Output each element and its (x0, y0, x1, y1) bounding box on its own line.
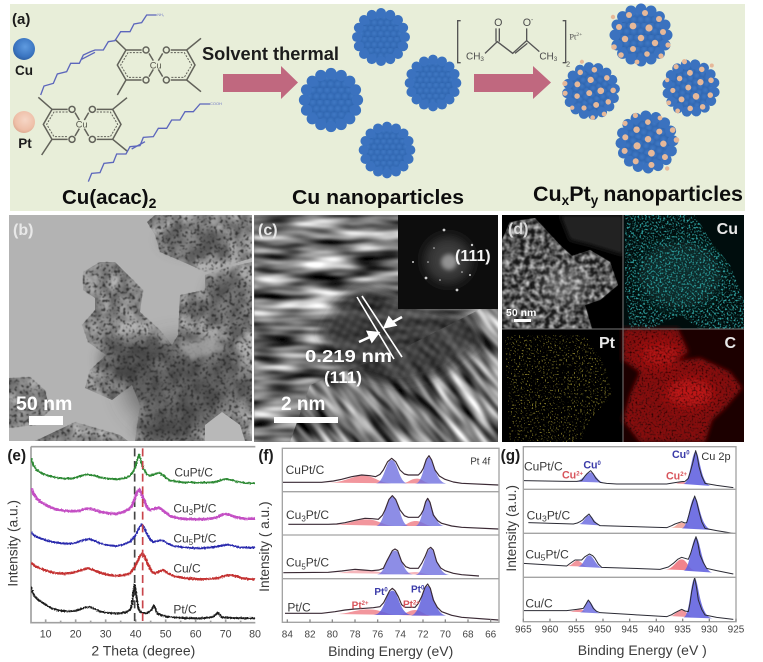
Pt peak annotations: 2+ (413, 600, 420, 606)
panel label g: (g) (501, 448, 520, 465)
lower Cu(acac)2 molecule (38, 97, 127, 155)
panel a: synthesis schematic (10, 4, 745, 211)
Pt 4f envelopes (282, 456, 498, 620)
XRD x tick labels: 60 (190, 628, 202, 640)
Cu nanoparticle (405, 55, 461, 111)
Cu 2p peak fills (567, 452, 713, 618)
Cu 2p series labels: 3 (542, 513, 547, 523)
CuPt nanoparticle (550, 50, 632, 132)
scale bar (514, 319, 531, 322)
XRD series labels: Pt/C (193, 531, 217, 545)
Pt peak annotations: Pt (374, 587, 384, 598)
panel label e: (e) (7, 448, 26, 465)
molecules: Cu(acac)2 with ligands (38, 13, 222, 182)
panel g: Cu 2p XPS (501, 447, 745, 658)
panel label a: (a) (12, 11, 30, 28)
XRD series labels (173, 466, 217, 616)
Cu 2p x ticks (523, 619, 736, 622)
Pt 4f x tick labels: 72 (417, 629, 429, 640)
Pt legend label: Pt (18, 136, 32, 151)
upper Cu(acac)2 molecule (115, 38, 201, 95)
Pt(acac)2 formula: 2 (566, 60, 570, 69)
panel label c: (c) (258, 222, 278, 239)
Pt 4f x tick labels: 82 (304, 629, 316, 640)
Cu 2p x tick labels: 925 (728, 624, 745, 635)
Cu 2p x tick labels: 950 (595, 624, 612, 635)
Cu legend label: Cu (15, 63, 33, 78)
Cu 2p frame and dividers (523, 447, 736, 622)
Pt 4f frame and dividers (282, 448, 499, 622)
Cu 2p y axis title: Intensity (a.u.) (504, 485, 519, 572)
scale bar (29, 416, 63, 425)
panel e: XRD chart (6, 447, 261, 659)
Cu 2p tag: Cu 2p (701, 451, 731, 463)
Pt(acac)2 formula: O (523, 17, 531, 29)
Pt 4f series labels: Pt/C (287, 600, 311, 614)
lattice fringe lines (357, 296, 402, 359)
Pt 4f series labels: Pt/C (306, 508, 329, 522)
FFT inset (398, 215, 498, 309)
Pt peak annotations: 2+ (362, 601, 369, 607)
row 2 peaks (333, 497, 445, 526)
row 4 peaks (335, 586, 448, 616)
Pt 4f y axis title: Intensity ( a.u.) (257, 502, 272, 592)
Pt 4f x tick labels: 76 (372, 629, 384, 640)
Pt(acac)2 formula: Pt (569, 32, 576, 41)
Pt 4f series labels: Cu (286, 556, 301, 570)
d-spacing label: 0.219 nm (305, 346, 392, 366)
caption: CuxPty nanoparticles: y (591, 193, 599, 208)
Cu 2p x axis title: Binding Energy (eV ) (578, 642, 707, 658)
Pt 4f series labels: Pt/C (306, 556, 329, 570)
FFT plane label: (111) (455, 248, 491, 265)
Pt 4f x tick labels: 78 (349, 629, 361, 640)
XRD series labels: 3 (189, 508, 194, 517)
Cu peak annotations: Cu (583, 459, 598, 471)
Cu 2p series labels (524, 460, 570, 610)
panel label d: (d) (508, 221, 528, 238)
row 1 peaks (328, 457, 448, 484)
panel label f: (f) (258, 448, 274, 465)
XRD x tick labels: 70 (220, 628, 232, 640)
arrow: fringe right (385, 317, 402, 327)
CuPt nanoparticle (610, 4, 672, 66)
XRD series labels: Cu (173, 531, 189, 545)
Cu peak annotations: Cu (562, 470, 576, 482)
arrow: solvent thermal (223, 66, 298, 99)
XRD x tick labels: 30 (100, 628, 112, 640)
XRD y axis title: Intensity (a.u.) (6, 500, 21, 587)
Cu 2p x tick labels: 955 (568, 624, 585, 635)
XRD x tick labels: 20 (70, 628, 82, 640)
oleylamine chain (41, 13, 165, 95)
caption: Cu(acac)2: 2 (149, 195, 157, 211)
Cu peak annotations: 0 (686, 451, 690, 457)
Pt 4f series labels: Cu (286, 508, 301, 522)
icon: Cu atom (13, 38, 35, 60)
Pt peak annotations: Pt (403, 600, 413, 611)
Cu 2p x tick labels: 935 (674, 624, 691, 635)
Cu 2p x tick labels: 940 (648, 624, 665, 635)
Pt 4f x tick labels: 68 (462, 629, 474, 640)
caption: Cu nanoparticles: Cu nanoparticles (292, 186, 464, 209)
Pt(acac)2 formula: CH (539, 51, 554, 62)
panel d: elemental mapping (502, 215, 744, 442)
C map (623, 329, 744, 442)
XRD x tick labels: 80 (249, 628, 261, 640)
Pt 4f x tick labels: 74 (395, 629, 406, 640)
Pt(acac)2 formula: 2+ (576, 32, 582, 38)
caption: CuxPty nanoparticles: x (562, 193, 570, 208)
Cu peak annotations: Cu (666, 470, 680, 482)
plane label: (111) (324, 368, 362, 387)
XRD x tick labels (40, 628, 261, 640)
Cu 2p x tick labels: 965 (515, 624, 532, 635)
C map label: C (724, 335, 736, 352)
caption: CuxPty nanoparticles: Pt (569, 182, 591, 206)
panel label b: (b) (13, 222, 33, 239)
Pt peak annotations: 0 (384, 588, 388, 594)
scale label 50 nm: 50 nm (16, 393, 72, 415)
Pt peak annotations: Pt (352, 600, 362, 611)
Pt 4f x axis title: Binding Energy (eV) (328, 643, 453, 659)
Cu nanoparticle (299, 68, 363, 132)
XRD x tick labels: 40 (130, 628, 142, 640)
panel f: Pt 4f XPS (257, 448, 499, 659)
Cu 2p x tick labels: 960 (542, 624, 559, 635)
Pt peak annotations: Pt (411, 585, 421, 596)
XRD x tick labels: 50 (160, 628, 172, 640)
XRD series labels: Cu/C (173, 562, 201, 576)
CuPt nanoparticle (657, 54, 725, 122)
Cu peak annotations: 2+ (680, 472, 688, 478)
caption: CuxPty nanoparticles: Cu (533, 182, 562, 206)
upper Cu(acac)2 molecule: Cu (150, 60, 162, 70)
Cu map (623, 215, 744, 329)
Pt peak annotations: 0 (421, 585, 425, 591)
XRD traces (31, 455, 255, 618)
Cu map label: Cu (717, 221, 738, 238)
CuPt nanoparticle (607, 102, 687, 182)
Pt 4f x tick labels: 70 (440, 629, 451, 640)
XRD series labels: Pt/C (173, 602, 197, 616)
XRD series labels: 5 (189, 538, 194, 547)
Pt 4f series labels (286, 463, 329, 614)
oleic acid chain: COOH (210, 101, 222, 106)
Cu 2p x tick labels (515, 624, 745, 635)
scale bar (274, 417, 338, 423)
panel c: HRTEM image (254, 215, 498, 442)
Cu 2p x tick labels: 945 (621, 624, 638, 635)
solvent thermal label: Solvent thermal (202, 44, 339, 64)
lower Cu(acac)2 molecule: Cu (76, 120, 88, 130)
panel b: TEM image (9, 215, 252, 444)
HAADF image (502, 215, 623, 329)
Pt 4f series labels: 5 (301, 562, 306, 571)
Cu nanoparticle (352, 8, 410, 66)
Pt 4f x tick labels: 66 (485, 629, 497, 640)
Pt map (502, 329, 623, 442)
Pt 4f series labels: CuPt/C (286, 463, 325, 477)
Pt(acac)2 formula: 3 (480, 56, 484, 63)
Pt 4f tag: Pt 4f (470, 456, 491, 467)
oleylamine chain: NH₂ (157, 13, 165, 17)
Cu 2p series labels: 5 (541, 552, 546, 562)
XRD series labels: CuPt/C (174, 466, 213, 480)
Cu peak annotations: Cu (672, 449, 686, 461)
caption: CuxPty nanoparticles: nanoparticles (603, 182, 743, 206)
Cu 2p envelopes (523, 451, 733, 619)
Cu peak annotations: 0 (598, 461, 602, 467)
Pt 4f x tick labels: 84 (282, 629, 293, 640)
Cu 2p series labels: Cu/C (525, 596, 553, 610)
arrow: Pt addition (474, 66, 551, 99)
Cu 2p series labels: CuPt/C (524, 460, 563, 474)
XRD axis frame (31, 447, 255, 623)
Cu 2p series labels: Cu (525, 547, 541, 561)
Pt 4f x tick labels (282, 629, 497, 640)
Pt map label: Pt (599, 335, 616, 352)
Pt(acac)2 formula: 3 (554, 56, 558, 63)
Pt(acac)2 formula: O (494, 17, 502, 29)
Cu peak annotations: 2+ (576, 471, 584, 477)
caption: Cu(acac)2: Cu(acac) (62, 186, 149, 209)
Pt 4f x tick labels: 80 (327, 629, 338, 640)
Cu peak annotations (562, 449, 690, 482)
Cu 2p series labels: Pt/C (545, 547, 569, 561)
reference dashed lines (132, 448, 137, 622)
Cu 2p series labels: Cu (527, 508, 542, 522)
XRD x axis title: 2 Theta (degree) (91, 643, 195, 659)
icon: Pt atom (13, 111, 35, 133)
arrow: fringe left (359, 332, 378, 342)
XRD x tick labels: 10 (40, 628, 52, 640)
Cu nanoparticle (359, 122, 415, 178)
Cu 2p series labels: Pt/C (547, 508, 570, 522)
oleic acid chain (88, 101, 222, 182)
Pt(acac)2 formula: CH (466, 51, 480, 62)
Pt 4f x ticks (287, 619, 491, 622)
scale label 50 nm: 50 nm (506, 307, 536, 319)
Pt 4f series labels: 3 (301, 515, 306, 524)
scale label 2 nm: 2 nm (281, 394, 325, 415)
Cu 2p x tick labels: 930 (701, 624, 718, 635)
XRD series labels: Pt/C (193, 501, 217, 515)
row 3 peaks (335, 549, 450, 575)
reference dashed line, red (140, 448, 145, 622)
Pt(acac)2 formula (458, 16, 582, 69)
Pt peak annotations (352, 585, 425, 611)
Pt(acac)2 formula: - (531, 16, 533, 23)
XRD series labels: Cu (173, 501, 189, 515)
